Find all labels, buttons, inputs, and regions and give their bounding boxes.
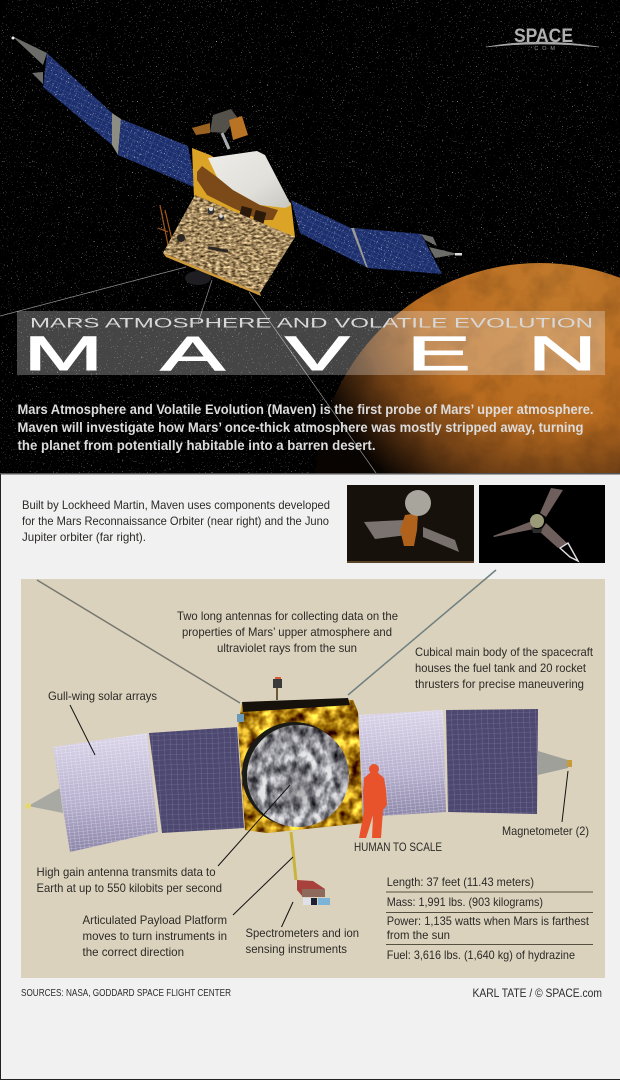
specifications list: Mass: 1,991 lbs. (903 kilograms) [387, 895, 543, 909]
tan insulated body [163, 195, 295, 296]
label: human to scale: HUMAN TO SCALE [354, 840, 442, 854]
antenna left [37, 580, 240, 703]
left inner solar panel [118, 119, 196, 188]
author credit: KARL TATE / © SPACE.com [472, 986, 602, 1000]
label: articulated payload platform: the correct direction [82, 945, 184, 959]
human silhouette to scale [359, 764, 387, 838]
title band [17, 311, 605, 375]
label: spectrometers: Spectrometers and ion [246, 926, 359, 940]
heritage text: Jupiter orbiter (far right). [22, 530, 146, 544]
specifications list: Power: 1,135 watts when Mars is farthest [387, 914, 590, 928]
under-body dish [185, 271, 211, 285]
right magnetometer [538, 751, 572, 775]
dark band under cone [197, 166, 278, 225]
left inner dark solar panel [149, 727, 244, 833]
solar panel hinge [112, 113, 121, 155]
right hinge [351, 228, 369, 268]
label: articulated payload platform: moves to turn instruments in [82, 929, 227, 943]
left magnetometer [25, 788, 63, 813]
payload boom [291, 832, 296, 880]
label: two long antennas: ultraviolet rays from the sun [217, 641, 357, 655]
label: cubical main body [415, 645, 594, 691]
label: two long antennas: Two long antennas for collecting data on the [177, 609, 398, 623]
label: cubical main body: Cubical main body of the spacecraft [415, 645, 594, 659]
white antenna cone [208, 151, 291, 208]
payload platform [192, 109, 248, 149]
photo: Juno orbiter [479, 485, 605, 563]
label: cubical main body: thrusters for precise maneuvering [415, 677, 584, 691]
label: high gain antenna: High gain antenna transmits data to [36, 865, 216, 879]
left outer light solar panel [53, 733, 158, 852]
planet Mars [316, 263, 620, 473]
right magnetometer boom [421, 234, 462, 258]
label: high gain antenna [36, 865, 222, 895]
intro text [18, 402, 594, 453]
main body [237, 698, 363, 833]
title: MAVEN: MAVEN [23, 327, 597, 381]
right outer dark solar panel [446, 709, 538, 814]
top instrument [273, 677, 282, 700]
label: gull-wing solar arrays: Gull-wing solar arrays [48, 689, 157, 703]
label: high gain antenna: Earth at up to 550 kilobits per second [36, 881, 222, 895]
right outer solar panel [354, 228, 442, 274]
label: spectrometers: sensing instruments [246, 942, 347, 956]
label: articulated payload platform: Articulated Payload Platform [82, 913, 227, 927]
articulated payload instruments [297, 880, 330, 905]
specifications list: Length: 37 feet (11.43 meters) [387, 875, 534, 889]
Space.com logo [486, 26, 599, 52]
pointer lines [70, 705, 568, 927]
subtitle: MARS ATMOSPHERE AND VOLATILE EVOLUTION [30, 316, 593, 330]
label: cubical main body: houses the fuel tank and 20 rocket [415, 661, 587, 675]
right inner light solar panel [359, 710, 446, 817]
label: spectrometers [246, 926, 359, 956]
panel: space hero [0, 0, 620, 474]
thin wires behind the spacecraft [0, 267, 376, 473]
heritage text: Built by Lockheed Martin, Maven uses components developed [22, 498, 330, 512]
specifications list [386, 875, 593, 962]
photo: Mars Reconnaissance Orbiter [347, 485, 474, 563]
page edge lines [0, 474, 620, 1080]
label: magnetometer: Magnetometer (2) [502, 824, 589, 838]
panel: spacecraft diagram [21, 570, 605, 978]
antenna right [348, 570, 496, 695]
label: two long antennas: properties of Mars’ upper atmosphere and [182, 625, 392, 639]
label: two long antennas [177, 609, 398, 655]
hero illustration: Maven spacecraft [12, 36, 462, 296]
Space.com logo: .COM [529, 46, 555, 52]
label: articulated payload platform [82, 913, 227, 959]
intro text: Mars Atmosphere and Volatile Evolution (Maven) is the first probe of Mars’ upper atmosphere. [18, 402, 594, 417]
right inner solar panel [291, 200, 366, 267]
Space.com logo: SPACE [514, 26, 573, 47]
left outer solar panel [43, 53, 112, 145]
star field [0, 0, 620, 473]
sources credit: SOURCES: NASA, GODDARD SPACE FLIGHT CENTER [21, 988, 231, 999]
high gain antenna dish [242, 722, 349, 827]
orange wires [158, 205, 172, 255]
specifications list: from the sun [387, 928, 450, 942]
gold collar [192, 148, 295, 237]
intro text: the planet from potentially habitable into a barren desert. [18, 438, 376, 453]
heritage text: for the Mars Reconnaissance Orbiter (near right) and the Juno [22, 514, 329, 528]
specifications list: Fuel: 3,616 lbs. (1,640 kg) of hydrazine [387, 948, 575, 962]
left magnetometer boom [12, 36, 47, 84]
heritage text [22, 498, 330, 544]
intro text: Maven will investigate how Mars’ once-thick atmosphere was mostly stripped away, turning [18, 420, 584, 435]
